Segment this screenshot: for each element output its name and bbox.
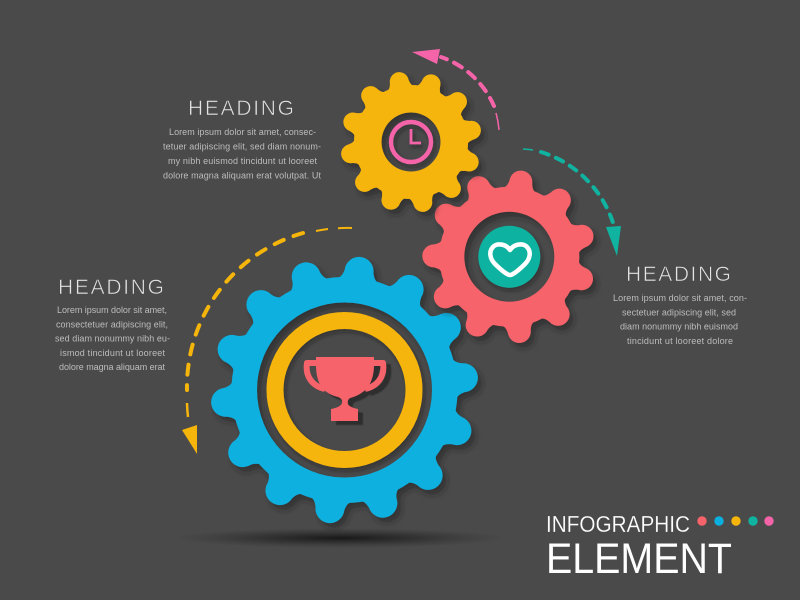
ground shadow bbox=[175, 528, 505, 548]
text block: top heading bbox=[163, 97, 321, 180]
text block: left heading: consectetuer adipiscing elit, bbox=[56, 319, 168, 329]
text block: left heading: Lorem ipsum dolor sit amet, bbox=[57, 305, 167, 315]
red gear with heart bbox=[422, 168, 598, 346]
text block: top heading: Lorem ipsum dolor sit amet, consec- bbox=[169, 127, 316, 137]
text block: top heading: my nibh euismod tincidunt ut looreet bbox=[168, 156, 317, 166]
icon: trophy bbox=[307, 357, 388, 425]
legend dots bbox=[697, 516, 774, 526]
text block: left heading bbox=[55, 276, 170, 372]
icon: heart bbox=[490, 244, 530, 275]
text block: left heading: dolore magna aliquam erat bbox=[59, 362, 165, 372]
teal disc bbox=[478, 226, 540, 288]
text block: left heading: sed diam nonummy nibh eu- bbox=[55, 334, 170, 344]
text block: left heading: ismod tincidunt ut looreet bbox=[60, 348, 165, 358]
text block: top heading: tetuer adipiscing elit, sed diam nonum- bbox=[163, 142, 321, 152]
arrow: teal bbox=[523, 149, 621, 256]
text block: top heading: HEADING bbox=[188, 97, 294, 120]
text block: top heading: dolore magna aliquam erat volutpat. Ut bbox=[163, 170, 321, 180]
yellow ring bbox=[275, 320, 414, 460]
text block: right heading: Lorem ipsum dolor sit amet, con- bbox=[613, 293, 747, 303]
text block: right heading: diam nonummy nibh euismod bbox=[620, 322, 738, 332]
arrow: pink bbox=[412, 49, 499, 130]
text block: right heading: tincidunt ut looreet dolore bbox=[627, 336, 733, 346]
title: infographic element bbox=[546, 511, 732, 583]
text block: right heading: sectetuer adipiscing elit, sed bbox=[622, 307, 736, 317]
title: infographic element: ELEMENT bbox=[546, 535, 732, 583]
text block: left heading: HEADING bbox=[58, 276, 164, 299]
title: infographic element: INFOGRAPHIC bbox=[546, 511, 690, 537]
blue gear with trophy bbox=[209, 254, 480, 526]
text block: right heading: HEADING bbox=[626, 263, 731, 286]
icon: clock bbox=[391, 122, 431, 162]
text block: right heading bbox=[613, 263, 747, 346]
yellow gear with clock bbox=[338, 69, 484, 215]
arrow: yellow bbox=[182, 228, 352, 454]
